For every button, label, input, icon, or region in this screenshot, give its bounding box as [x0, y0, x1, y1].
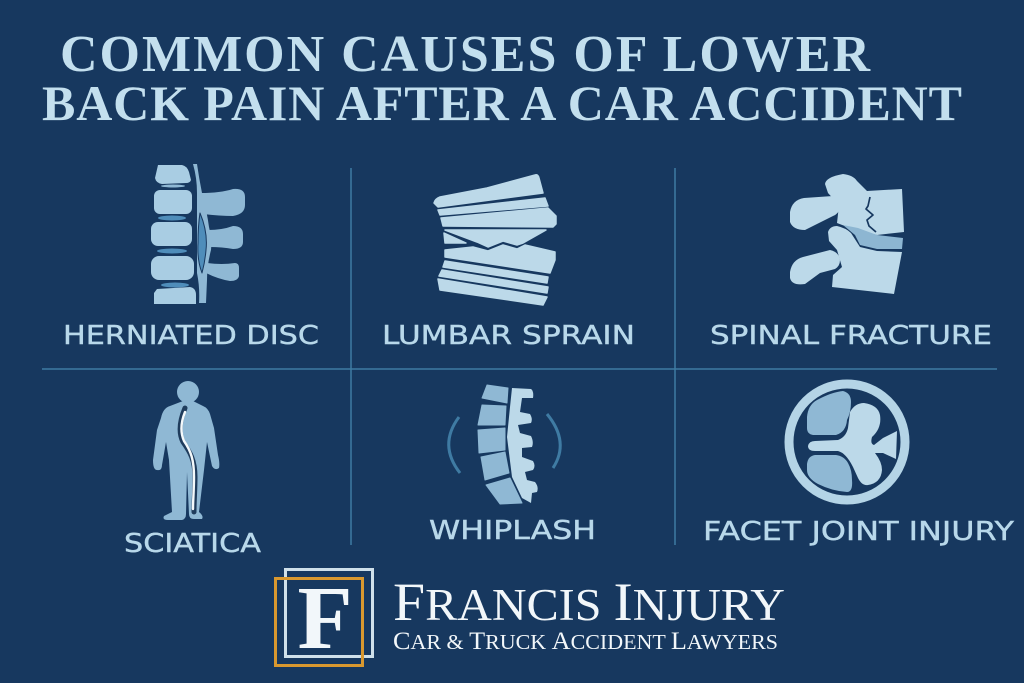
- tagline: CAR & TRUCK ACCIDENT LAWYERS: [393, 628, 778, 655]
- label: facet joint injury: FACET JOINT INJURY: [703, 517, 1014, 547]
- panel: herniated disc: [63, 164, 319, 351]
- panel: spinal fracture: [710, 174, 992, 351]
- icon: human figure with sciatic nerve: [153, 381, 219, 520]
- logo mark: F: [298, 569, 352, 668]
- title: [42, 26, 962, 131]
- label: lumbar sprain: LUMBAR SPRAIN: [382, 321, 635, 351]
- title: BACK PAIN AFTER A CAR ACCIDENT: [42, 75, 962, 131]
- label: whiplash: WHIPLASH: [429, 516, 596, 546]
- firm name: FRANCIS INJURY: [393, 572, 785, 632]
- label: sciatica: SCIATICA: [124, 529, 261, 559]
- icon: curved spine with motion arcs: [449, 385, 560, 504]
- panel: whiplash: [429, 385, 596, 546]
- logo mark: [276, 569, 372, 668]
- icon: facet joint in a circle: [789, 384, 905, 500]
- panel: sciatica: [124, 381, 261, 559]
- label: herniated disc: HERNIATED DISC: [63, 321, 319, 351]
- logo: Francis Injury: [276, 569, 785, 668]
- icon: torn muscle: [434, 175, 556, 305]
- icon: herniated disc spine: [151, 164, 245, 304]
- icon: fractured vertebra: [790, 174, 904, 294]
- title: COMMON CAUSES OF LOWER: [60, 26, 871, 83]
- panel: facet joint injury: [703, 384, 1014, 547]
- panel: lumbar sprain: [382, 175, 635, 351]
- label: spinal fracture: SPINAL FRACTURE: [710, 321, 992, 351]
